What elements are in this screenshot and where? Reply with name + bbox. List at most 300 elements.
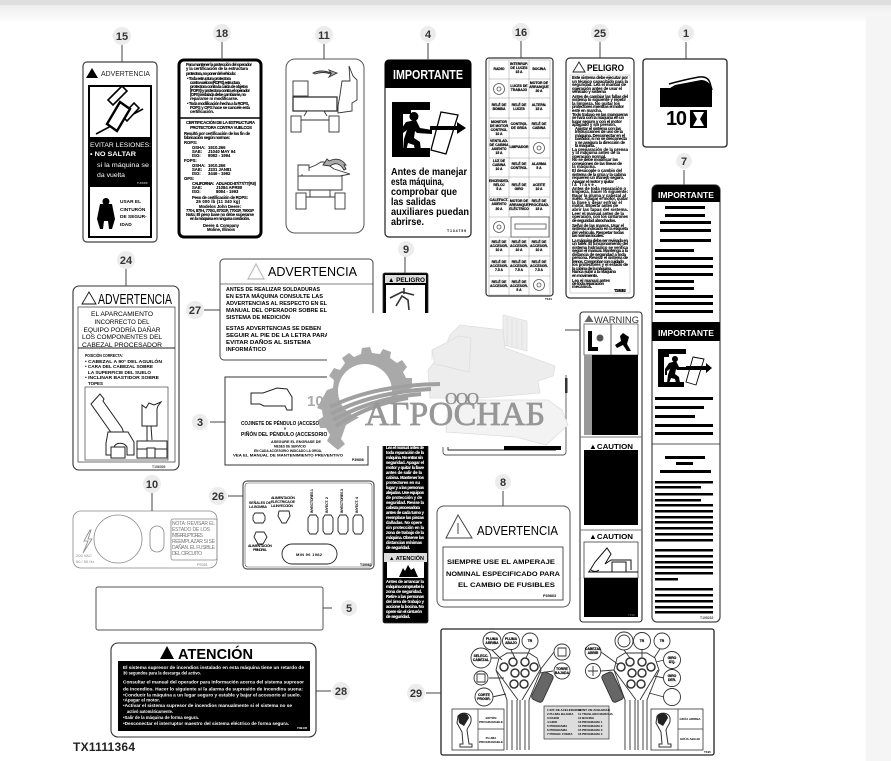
- fuse labels: RELÉ DE: [492, 102, 507, 107]
- text block: body: distancias mínimas: [386, 540, 423, 545]
- text block: soldaduras: EN ESTA MÁQUINA CONSULTE LAS: [226, 293, 324, 300]
- icon: machine rear view: [296, 159, 350, 209]
- text block: peligro body: frenos. Comprobar con cuidado: [572, 259, 624, 264]
- badge 25: 25: [594, 28, 606, 40]
- badge 16: 16: [515, 27, 527, 39]
- text block: fire suppression: Consultar el manual del operador para información acerca del sistema supresor: [123, 680, 304, 684]
- text block: aparcamiento: [82, 311, 162, 349]
- fuse labels: 5 A: [536, 166, 542, 170]
- icon: machine top view: [291, 66, 357, 132]
- fuse labels: ACCESOR.: [530, 244, 548, 248]
- left button labels: BAJADA: [555, 671, 570, 675]
- text block: body: de protección y de: [386, 495, 423, 500]
- right button labels: IZQ.: [669, 660, 675, 664]
- badge 7: [676, 153, 692, 169]
- fuse labels: RELOJ: [493, 183, 505, 187]
- text block: body: cabina. Mantener los: [386, 475, 425, 480]
- fuse labels: LUCES DE: [510, 84, 528, 88]
- text block: peligro body: Antes de cambiar las fallas del: [572, 94, 628, 99]
- text block: posicion correcta: LA SUPERFICIE DEL SUELO: [88, 370, 151, 375]
- panel: decal 26: [243, 481, 374, 569]
- icon: left hand box: [452, 709, 504, 750]
- text block: certification: J1040 MAY 94: [208, 149, 236, 154]
- left button labels: PLUMA: [505, 637, 518, 641]
- heading: warning: WARNING: [594, 315, 639, 325]
- icon: excavator: [588, 548, 638, 572]
- text block: certification: OSHA:: [192, 145, 206, 150]
- text block: peligro body: apagado y sin presión.: [572, 122, 616, 127]
- right button labels: TR: [640, 639, 645, 643]
- panel: warning caution decal: T195: [628, 613, 635, 617]
- text block: soldaduras: ANTES DE REALIZAR SOLDADURAS: [226, 287, 321, 293]
- fuse labels: CABINA: [492, 163, 506, 167]
- badge 9: [398, 241, 414, 257]
- icon: pendulum bearing: [660, 80, 712, 107]
- text block: certification: FOPS:: [184, 158, 197, 163]
- icon: warning outline: [573, 62, 585, 72]
- left button labels: CABEZAL: [473, 658, 489, 662]
- text block: evitar lesiones: [90, 142, 151, 185]
- text block: antes de manejar: abrirse.: [391, 217, 424, 228]
- text block: antes de manejar: esta máquina,: [391, 177, 444, 188]
- text block: peligro body: Instrucciones de uso de la: [575, 129, 624, 134]
- text block: atencion body: Retire a las personas: [386, 594, 425, 599]
- text block: peligro body: limpieza, hacer lo siguiente:: [572, 189, 628, 194]
- heading: peligro small: ▲ PELIGRO: [388, 277, 425, 284]
- panel: decal 9: [383, 273, 428, 623]
- panel: decal 15: [83, 62, 157, 242]
- text block: certification: ISO:: [192, 153, 201, 158]
- text block: evitar lesiones: EVITAR LESIONES:: [90, 142, 151, 149]
- icon: emergency exit small: [658, 349, 712, 387]
- text block: body: máquina. No entrar sin: [386, 455, 423, 460]
- table: button legend: 13 PROGRAMA 1: [578, 720, 603, 724]
- text block: peligro body: lugar seguro y con el motor: [572, 119, 622, 124]
- fuse labels: ACCESOR.: [490, 284, 508, 288]
- table: button legend: 11 TRASLADO MARCHA: [578, 712, 614, 716]
- text block: decal 10: INTERRUPTORES: [172, 533, 204, 539]
- text block: aparcamiento: EL APARCAMIENTO: [91, 311, 153, 318]
- badge 27: [186, 301, 204, 319]
- badge 5: [341, 600, 357, 616]
- badge 26: 26: [212, 491, 224, 503]
- text block: peligro body: de seguridad abrochados.: [572, 218, 616, 223]
- badge 1: [678, 25, 694, 41]
- left button labels: CORTE: [478, 693, 491, 697]
- heading: atencion small: ▲ ATENCIÓN: [389, 554, 424, 562]
- fuse labels: RELÉ DE: [512, 161, 527, 166]
- icon: faded warning triangle: [248, 264, 264, 279]
- text block: evitar lesiones: si la máquina se: [97, 163, 150, 169]
- text block: atencion body: [386, 579, 425, 619]
- connector labels: T39062: [360, 563, 372, 567]
- panel: decal 29 joystick chart: [441, 629, 714, 755]
- text block: certification: SAE:: [192, 185, 202, 190]
- table: button legend: 5 PROGRAMA: [547, 724, 568, 728]
- icon: pendulum outline: [251, 388, 292, 410]
- text block: body: seguridad. Revise la: [386, 500, 425, 505]
- text block: body: Lea el manual antes de: [386, 445, 425, 450]
- panel: decal 5 blank: [96, 587, 323, 630]
- fuse labels: INTERRUP.: [510, 62, 528, 66]
- table: button legend: 16 PROGRAMA 4: [578, 732, 603, 736]
- fuse labels: RELÉ DE: [512, 239, 527, 244]
- text block: body: de seguridad.: [386, 545, 410, 550]
- badge 15: 15: [116, 31, 128, 43]
- text block: certification: 25 000 lb (11 340 kg): [196, 199, 241, 204]
- text block: cojinete: COJINETE DE PÉNDULO (ACCESORIO): [241, 419, 329, 427]
- fuse labels: RELÉ DE: [512, 259, 527, 264]
- text: agrosnab: АГРОСНАБ: [365, 396, 545, 433]
- icon: warning triangle: [446, 515, 472, 538]
- text block: fire suppression: •Salir de la máquina de forma segura.: [123, 715, 199, 720]
- text block: peligro body: la cabina de la máquina.: [572, 266, 612, 271]
- text block: aparcamiento: LOS COMPONENTES DEL: [82, 334, 162, 341]
- connector labels: MIN 96 1982: [296, 552, 323, 557]
- text block: atencion body: zona de seguridad.: [386, 589, 422, 594]
- panel: decal 11: [286, 59, 364, 233]
- table: button legend: 3 RADIO: [547, 716, 560, 720]
- text block: peligro body: Apagar el motor y quitar: [572, 179, 614, 184]
- left button labels: PROGR.: [477, 697, 491, 701]
- text block: peligro body: sistema hidráulico se verifica: [572, 245, 629, 250]
- right button labels: [585, 639, 677, 682]
- panel: decal 18: [179, 60, 261, 237]
- connector labels: ELÉCTRICA DE: [271, 499, 296, 504]
- text block: operator protection: FOPS y OPS hace se cancele esta: [190, 105, 251, 110]
- text bars lower: [655, 397, 713, 614]
- left button labels: [473, 637, 570, 701]
- heading: atencion: ATENCIÓN: [178, 645, 253, 663]
- text block: peligro body: Bajar la pluma y cabezal al: [572, 193, 626, 198]
- table: button legend: 6 PROGRAMA: [547, 728, 568, 732]
- fuse labels: ASIENTO: [491, 202, 507, 206]
- fuse labels: MOTOR DE: [530, 81, 549, 85]
- text block: peligro body: sistema indicado en la etiqueta: [572, 226, 629, 231]
- text block: certification: Nota: El peso base no debe superarse: [186, 212, 255, 217]
- text block: fire suppression: •Desconectar el interruptor maestro del sistema eléctrico de forma segura.: [123, 721, 289, 726]
- table: button legend: 10 INT. DE ACELERAD.: [578, 708, 611, 712]
- fuse labels: RELÉ DE: [532, 259, 547, 264]
- fuse labels: RELÉ DE: [532, 198, 547, 203]
- text block: atencion body: del área de trabajo y: [386, 599, 425, 604]
- text block: certification: SAE:: [192, 149, 202, 154]
- fuse labels: LUZ DE: [493, 159, 506, 163]
- fuse labels: RELÉ DE: [492, 239, 507, 244]
- text block: usar el cinturon: USAR EL: [120, 199, 141, 205]
- fuse labels: MONITOR: [491, 120, 508, 124]
- fuse labels: RELÉ DE: [492, 259, 507, 264]
- text block: soldaduras: SISTEMA DE MEDICIÓN: [226, 313, 290, 321]
- left button labels: ABAJO: [505, 641, 517, 645]
- text block: peligro body: Leer el manual antes de la: [572, 211, 625, 216]
- text block: certification: 770-I, 870-I, 770G, 870GP, 770GP, 790GP: [186, 208, 254, 213]
- heading: advertencia: ADVERTENCIA: [98, 291, 172, 308]
- text block: operator protection: Para mantener la protección del operador: [186, 62, 252, 67]
- panel: decal 8: P39803: [543, 594, 556, 598]
- text block: body: toda reparación de la: [386, 450, 425, 455]
- text block: peligro body: Señal de las manos. Usar el: [572, 223, 624, 228]
- panel: decal fragment: [443, 375, 568, 455]
- fuse labels: RELÉ DE: [532, 239, 547, 244]
- text block: soldaduras: MANUAL DEL OPERADOR SOBRE EL: [226, 308, 327, 314]
- right button labels: TR: [660, 639, 665, 643]
- text block: peligro body: sistema de la grúa y la cabina: [572, 172, 627, 177]
- badge 18: 18: [216, 28, 228, 40]
- badge 29: [407, 684, 425, 702]
- fuse labels: CONTROL: [511, 166, 527, 170]
- heading: advertencia: ADVERTENCIA: [101, 71, 150, 78]
- panel: decal 16 fuse chart: [486, 58, 553, 301]
- text block: peligro body: Antes de toda reparación o: [572, 186, 626, 191]
- text block: certification: Moline, Illinois: [207, 227, 236, 232]
- text block: cojinete: ASEGURE EL ENGRASE DE: [271, 439, 321, 444]
- right button labels: GIRO: [668, 656, 677, 660]
- fuse labels: RADIO: [494, 67, 505, 71]
- connector labels: ALIMENTACIÓN: [271, 495, 295, 500]
- heading: importante top: IMPORTANTE: [658, 190, 714, 200]
- text block: antes de manejar: [391, 167, 469, 233]
- text block: peligro body: conexiones de las líneas de: [572, 161, 623, 166]
- fuse labels: GIRO: [515, 187, 524, 191]
- text block: operator protection: protectora contra la caída de objetos: [190, 84, 249, 89]
- table: button legend: 15 PROGRAMA 3: [578, 728, 603, 732]
- icon: left hand box: PLUMA: [486, 736, 497, 740]
- text block: fire suppression: •Activar el sistema supresor de incendios manualmente si el sistema no se: [123, 703, 293, 708]
- text block: atencion body: de seguridad.: [386, 614, 410, 619]
- text block: peligro body: vehículo y sistema: [572, 89, 607, 94]
- table: button legend: 7 PROGR. FUERA: [547, 732, 573, 736]
- text block: peligro body: esté en marcha.: [572, 108, 602, 113]
- text block: body: motor y quitar la llave: [386, 465, 425, 470]
- text: ooo: ООО: [445, 389, 479, 408]
- text bars top: [655, 206, 713, 313]
- icon: warning pictograms: [588, 331, 631, 351]
- fuse labels: 10 A: [535, 248, 543, 252]
- fuse labels: 20 A: [495, 207, 503, 211]
- fuse labels: 10 A: [515, 248, 523, 252]
- text block: peligro body: sistema lo siguiente y repetir: [572, 97, 626, 102]
- fuse labels: RELÉ DE: [512, 102, 527, 107]
- badge 24: 24: [120, 255, 133, 267]
- fuse labels: ACCESOR.: [530, 264, 548, 268]
- text block: decal 10: REEMPLAZAR SI SE: [172, 539, 216, 545]
- text block: operator protection: repararse ni modificarse.: [190, 96, 238, 101]
- text block: certification: fabricación según normas:: [184, 135, 230, 140]
- badge 4: [420, 26, 436, 42]
- badge 26: [209, 487, 227, 505]
- chart: left joystick: [471, 632, 570, 750]
- badge 18: [213, 24, 231, 42]
- text block: atencion body: opere sin el cinturón: [386, 609, 422, 614]
- icon: atencion hazard: [399, 565, 418, 577]
- text block: fire suppression: activó automáticamente.: [127, 709, 173, 714]
- text block: peligro body: máquina. Desconectar en el: [575, 133, 625, 138]
- heading: peligro: PELIGRO: [587, 63, 624, 73]
- text block: peligro body: protectores mientras el motor: [572, 104, 624, 109]
- badge 16: [512, 23, 530, 41]
- text block: peligro body: Lea el manual antes: [572, 278, 611, 283]
- text block: posicion correcta: • CABEZAL A 90° DEL AGUILÓN: [85, 357, 163, 364]
- text block: evitar lesiones: T-XXXX: [137, 181, 148, 185]
- fuse labels: ENCENDED.: [489, 179, 509, 183]
- fuse labels: DE LUCES: [510, 66, 528, 70]
- text block: certification: SAE:: [192, 167, 202, 172]
- text block: evitar lesiones: da vuelta: [97, 173, 126, 179]
- fuse labels: RELÉ DE: [512, 279, 527, 284]
- fuse labels: BOCINA: [532, 67, 546, 71]
- text block: body: [386, 445, 425, 550]
- text block: cojinete: [233, 419, 343, 458]
- text block: operator protection: [186, 62, 252, 114]
- fuse labels: 5 A: [496, 187, 502, 191]
- left button labels: PLUMA: [486, 637, 499, 641]
- text block: operator protection: certificación.: [190, 109, 214, 114]
- panel: warning caution decal: [580, 312, 642, 622]
- text block: certification: 1910.266: [208, 145, 226, 150]
- text block: soldaduras: INFORMÁTICO: [226, 346, 266, 353]
- fuse labels: LUCES: [513, 107, 525, 111]
- text block: certification: PROTECTORA CONTRA VUELCOS: [190, 125, 252, 130]
- fuse labels: CABINA: [532, 126, 546, 130]
- text block: body: reemplace las piezas: [386, 515, 425, 520]
- text block: peligro body: del vehículo. Respetar todas: [572, 230, 625, 235]
- text block: body: antes de cada turno y: [386, 510, 425, 515]
- fuse labels: ACCESOR.: [510, 284, 528, 288]
- text block: body: alejadas. Use equipos: [386, 490, 425, 495]
- right button labels: CABEZAL: [585, 647, 601, 651]
- text block: peligro body: según el manual. Mantenga a la: [572, 248, 629, 253]
- text block: certification: OSHA:: [192, 163, 206, 168]
- text block: atencion body: máquina compruebe la: [386, 584, 425, 589]
- heading: importante middle: IMPORTANTE: [658, 328, 714, 338]
- panel: decal 29 joystick chart: T195: [704, 750, 711, 754]
- badge 5: 5: [346, 603, 352, 615]
- text block: peligro body: un taller. El funcionamiento del: [572, 241, 628, 246]
- fuse labels: ARRANQUE: [529, 85, 550, 89]
- text block: soldaduras: SEGUIR AL PIE DE LA LETRA PARA: [226, 333, 329, 339]
- text block: peligro body: distancia de seguridad a toda: [572, 252, 627, 257]
- fuse labels: VENTILAD.: [490, 139, 508, 143]
- fuse labels: RELÉ DE: [512, 182, 527, 187]
- fuse labels: ACCESOR.: [510, 264, 528, 268]
- text block: soldaduras: ADVERTENCIAS AL RESPECTO EN EL: [226, 301, 327, 307]
- text block: peligro body: mecánica.: [572, 284, 592, 289]
- text block: peligro body: seguridad. Lea el manual de: [572, 82, 627, 87]
- connector labels: ALIMENTACIÓN: [248, 543, 272, 548]
- text block: posicion correcta: [85, 351, 163, 386]
- text block: fire suppression: de incendios. Hacer lo siguiente si la alarma de supresión de incendios suena:: [123, 686, 304, 692]
- text block: soldaduras: [226, 287, 329, 353]
- left button labels: TORRE: [556, 667, 569, 671]
- text block: decal 10: PS301: [197, 563, 208, 567]
- fuse labels: 15 A: [535, 107, 543, 111]
- fuse labels: ACEITE: [533, 183, 546, 187]
- text block: decal 10: [76, 521, 216, 567]
- fuse labels: DE CABINA: [490, 143, 509, 147]
- text block: certification: ADUADD-87/77/77(P.8): [216, 181, 257, 186]
- text block: operator protection: (OPS) instalada debe cambiarse, no: [190, 92, 246, 97]
- connector labels: LA BOMBA: [249, 505, 267, 509]
- text block: peligro body: en movimiento.: [572, 273, 598, 278]
- text block: usar el cinturon: CINTURÓN: [120, 205, 146, 213]
- icon: emergency exit: [392, 102, 466, 157]
- table: button legend: 12 BOCINA: [578, 716, 595, 720]
- fuse labels: 10 A: [535, 187, 543, 191]
- text block: certification: J1084 APR80: [216, 185, 243, 190]
- text block: peligro body: Todo trabajo en las mangueras: [572, 112, 629, 117]
- badge 25: [591, 24, 609, 42]
- text block: body: seguridad. Apagar el: [386, 460, 424, 465]
- fuse labels: 15 A: [535, 207, 543, 211]
- connector labels: INYECTORES 1: [310, 489, 314, 513]
- text block: fire suppression: 30 segundos para la descarga del activo.: [123, 670, 201, 676]
- badge 28: 28: [335, 686, 347, 698]
- fuse labels: RELÉ DE: [492, 279, 507, 284]
- badge 9: 9: [403, 244, 409, 256]
- panel: decal 10: [73, 511, 217, 568]
- fuse labels: DE MOTOR: [490, 124, 509, 128]
- connector labels: SEÑALES DE: [249, 500, 272, 505]
- text block: antes de manejar: las salidas: [391, 197, 436, 208]
- fuse labels: 7.5 A: [515, 268, 524, 272]
- panel: decal 16 fuse chart: T134: [545, 297, 552, 301]
- number 10: 10: [307, 393, 324, 410]
- left button labels: ARRIBA: [485, 641, 499, 645]
- watermark: agrosnab logo: [317, 313, 568, 450]
- left button labels: TR: [528, 639, 533, 643]
- icon: lightning bolt: [83, 530, 92, 553]
- number badges: [113, 23, 694, 702]
- icon: warning triangle: [160, 646, 174, 659]
- text block: peligro body: requieren un manejo seguro.: [572, 175, 624, 180]
- right button labels: DER.: [668, 678, 676, 682]
- fuse labels: ALTERN.: [532, 103, 546, 107]
- text block: certification: ISO:: [192, 171, 201, 176]
- text block: certification: OPS:: [184, 176, 194, 181]
- fuse labels: ACCESOR.: [510, 244, 528, 248]
- connector labels: PRINCIPAL: [253, 548, 268, 552]
- icon: swoosh: [330, 384, 440, 426]
- fuse labels: CONTROL: [491, 128, 507, 132]
- text block: usar el cinturon: [120, 199, 147, 228]
- fuse labels: 7.5 A: [495, 268, 504, 272]
- text block: peligro body: la llave y dejar enfriar el: [572, 200, 622, 205]
- text block: decal 10: 200 VAC: [76, 553, 92, 558]
- text block: usar el cinturon: DE SEGUR-: [120, 214, 147, 220]
- fuse labels: ASIENTO: [491, 147, 507, 151]
- text block: body: máquina. Observe las: [386, 535, 425, 540]
- text block: operator protection: • Toda modificación hecha a la ROPS,: [187, 101, 249, 106]
- table: button legend: [544, 706, 614, 739]
- text block: body: dañadas. No opere: [386, 520, 423, 525]
- text block: posicion correcta: • INCLINAR BASTIDOR SOBRE: [85, 375, 159, 380]
- text block: peligro body: No se debe modificar las: [572, 157, 619, 162]
- text block: peligro body: Este sistema debe ejecutar por: [572, 75, 628, 80]
- heading: advertencia: [82, 291, 172, 308]
- panel: decal 7 importante: T195232: [700, 616, 713, 620]
- badge 15: [113, 27, 131, 45]
- icon: warning triangle: [86, 68, 98, 78]
- text block: certification: 1910.266: [208, 163, 226, 168]
- fuse labels: CALEFACT.: [490, 198, 509, 202]
- text block: decal 10: DAÑAN. EL FUSIBLE: [172, 544, 216, 551]
- text block: certification: 8084 - 1993: [216, 189, 239, 194]
- icon: gear: [317, 347, 412, 450]
- heading: caution 1: ▲CAUTION: [589, 442, 633, 451]
- text block: body: antes de salir de la: [386, 470, 423, 475]
- badge 27: 27: [189, 305, 201, 317]
